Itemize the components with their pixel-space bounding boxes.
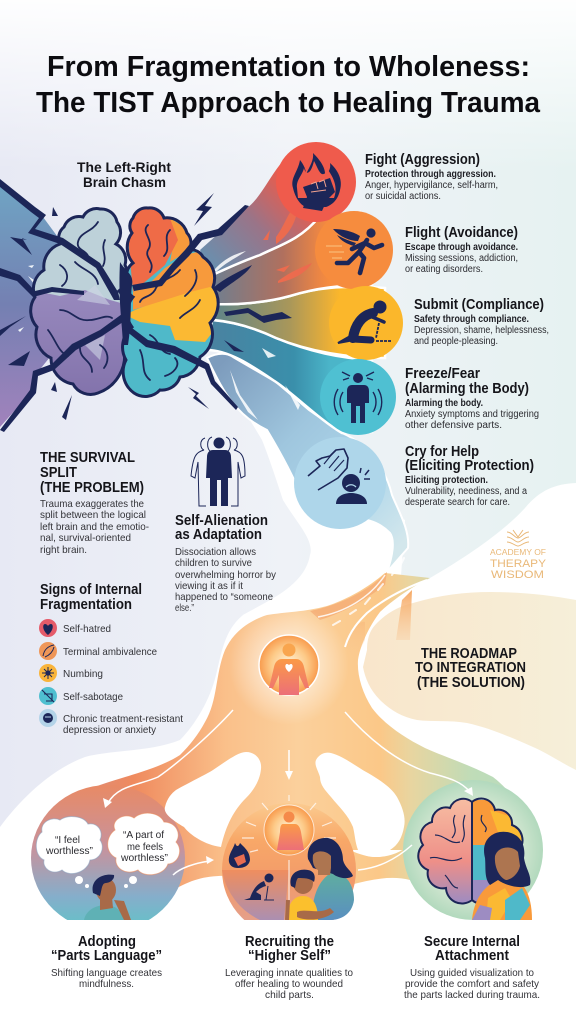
caption: secure internal attachment: Attachment bbox=[435, 948, 509, 964]
text block: self-alienation: happened to “someone bbox=[175, 592, 273, 603]
arrow: to parts language bbox=[103, 710, 233, 808]
label: fight: or suicidal actions. bbox=[365, 191, 441, 202]
brain folds bbox=[48, 222, 200, 380]
heading: left-right brain chasm: The Left-Right bbox=[77, 160, 172, 175]
label: freeze: Anxiety symptoms and triggering bbox=[405, 409, 539, 420]
caption: secure internal attachment: the parts lacked during trauma. bbox=[404, 990, 540, 1001]
sign: self-hatred bbox=[39, 619, 111, 637]
figure: woman with integrated parts bbox=[472, 832, 532, 920]
circle: adopting parts language bbox=[31, 785, 185, 931]
caption: adopting parts language: “Parts Language” bbox=[51, 948, 162, 964]
cracks through the brain bbox=[0, 179, 249, 432]
caption: secure internal attachment: Using guided visualization to bbox=[410, 968, 534, 979]
label: cry for help: desperate search for care. bbox=[405, 497, 510, 508]
figure: thinking man bbox=[75, 875, 137, 920]
sign: terminal ambivalence bbox=[39, 642, 157, 660]
lightning bolts bbox=[188, 193, 214, 409]
rays bbox=[242, 795, 336, 900]
label: submit bbox=[414, 297, 549, 347]
icon: kneeling figure with chain bbox=[338, 300, 392, 343]
label: fight: Anger, hypervigilance, self-harm, bbox=[365, 180, 498, 191]
list: signs of internal fragmentation bbox=[39, 582, 183, 736]
speech cloud: a part of me feels worthless bbox=[108, 813, 180, 875]
caption: recruiting the higher self: Leveraging innate qualities to bbox=[225, 968, 353, 979]
sign: chronic depression or anxiety bbox=[39, 709, 183, 736]
sign: self-sabotage: Self-sabotage bbox=[63, 692, 123, 703]
icon: running figure bbox=[326, 228, 382, 273]
Freeze panel bbox=[320, 359, 539, 435]
Flight panel bbox=[315, 211, 518, 289]
speech cloud: I feel worthless: worthless” bbox=[45, 846, 93, 857]
caption: secure internal attachment: Secure Internal bbox=[424, 934, 520, 950]
stream: flight bbox=[212, 212, 372, 304]
caption: adopting parts language bbox=[51, 934, 162, 990]
stream details bbox=[213, 205, 312, 420]
brain: integrated bbox=[418, 799, 522, 905]
icon: flaming fist bbox=[292, 153, 341, 211]
stream: cry for help bbox=[207, 354, 408, 572]
text block: self-alienation: Dissociation allows bbox=[175, 547, 256, 558]
circle: recruiting the higher self bbox=[222, 795, 356, 920]
text block: the survival split: SPLIT bbox=[40, 465, 77, 481]
label: fight: Fight (Aggression) bbox=[365, 152, 480, 168]
caption: recruiting the higher self: Recruiting the bbox=[245, 934, 334, 950]
text block: self-alienation: as Adaptation bbox=[175, 527, 262, 543]
label: flight: Flight (Avoidance) bbox=[405, 225, 518, 241]
text block: the survival split: right brain. bbox=[40, 545, 87, 556]
circle: secure internal attachment bbox=[403, 780, 543, 920]
sign: chronic depression or anxiety: depression or anxiety bbox=[63, 725, 157, 736]
label: freeze bbox=[405, 366, 539, 431]
caption: recruiting the higher self bbox=[225, 934, 353, 1001]
caption: adopting parts language: mindfulness. bbox=[79, 979, 134, 990]
text block: self-alienation: overwhelming horror by bbox=[175, 570, 277, 581]
arrow: to secure attachment bbox=[345, 712, 473, 796]
label: submit: Depression, shame, helplessness, bbox=[414, 325, 549, 336]
arrow: higher self to attachment bbox=[358, 845, 412, 870]
icon: integrated self orb bbox=[259, 635, 319, 695]
label: submit: Safety through compliance. bbox=[414, 314, 529, 325]
label: cry for help: (Eliciting Protection) bbox=[405, 458, 534, 474]
text block: the survival split: nal, survival-oriented bbox=[40, 533, 131, 544]
text block: self-alienation: children to survive bbox=[175, 558, 252, 569]
logo: academy of therapy wisdom: THERAPY bbox=[490, 558, 547, 570]
text block: the survival split bbox=[40, 450, 149, 556]
sign: self-sabotage bbox=[39, 687, 123, 705]
right hemisphere bbox=[124, 209, 217, 395]
heading: left-right brain chasm: Brain Chasm bbox=[83, 175, 166, 190]
label: cry for help: Vulnerability, neediness, and a bbox=[405, 486, 527, 497]
left hemisphere bbox=[32, 210, 125, 393]
sign: chronic depression or anxiety: Chronic treatment-resistant bbox=[63, 714, 183, 725]
icon: small kneeling figure bbox=[244, 874, 274, 900]
Submit panel bbox=[329, 286, 549, 360]
caption: secure internal attachment: provide the comfort and safety bbox=[405, 979, 540, 990]
logo: academy of therapy wisdom: WISDOM bbox=[491, 569, 544, 581]
speech cloud: I feel worthless bbox=[36, 817, 102, 874]
stream: submit bbox=[214, 287, 385, 358]
text block: the survival split: THE SURVIVAL bbox=[40, 450, 135, 466]
holes between branches bbox=[165, 752, 261, 847]
text block: the survival split: Trauma exaggerates the bbox=[40, 499, 144, 510]
title bbox=[36, 51, 541, 119]
label: submit: Submit (Compliance) bbox=[414, 297, 544, 313]
label: freeze: other defensive parts. bbox=[405, 420, 502, 431]
icon: alarmed body bbox=[334, 372, 382, 423]
caption: recruiting the higher self: offer healing to wounded bbox=[235, 979, 343, 990]
logo: academy of therapy wisdom: ACADEMY OF bbox=[490, 547, 546, 557]
label: cry for help bbox=[405, 444, 534, 508]
title: The TIST Approach to Healing Trauma bbox=[36, 87, 541, 119]
label: submit: and people-pleasing. bbox=[414, 336, 498, 347]
label: flight: Escape through avoidance. bbox=[405, 242, 518, 253]
title: From Fragmentation to Wholeness: bbox=[47, 51, 530, 83]
panel: the roadmap to integration bbox=[363, 592, 576, 770]
sign: numbing: Numbing bbox=[63, 669, 103, 680]
icon: small flaming fist bbox=[229, 843, 250, 868]
sign: terminal ambivalence: Terminal ambivalence bbox=[63, 647, 157, 658]
text block: self-alienation: else.” bbox=[175, 603, 194, 614]
caption: recruiting the higher self: child parts. bbox=[265, 990, 314, 1001]
label: cry for help: Eliciting protection. bbox=[405, 475, 488, 486]
speech cloud: I feel worthless: “I feel bbox=[55, 835, 80, 846]
list: signs of internal fragmentation: Signs of Internal bbox=[40, 582, 142, 598]
arrow: to higher self bbox=[285, 750, 293, 780]
logo: academy of therapy wisdom bbox=[490, 530, 547, 581]
stream: fight bbox=[200, 147, 325, 275]
left wedge with lightning bbox=[0, 182, 72, 427]
label: flight bbox=[405, 225, 518, 275]
label: cry for help: Cry for Help bbox=[405, 444, 479, 460]
text block: self-alienation: Self-Alienation bbox=[175, 513, 268, 529]
arrow: parts language to higher self bbox=[173, 856, 214, 875]
panel: the roadmap to integration: TO INTEGRATION bbox=[415, 660, 526, 676]
brain bbox=[0, 179, 249, 432]
text block: the survival split: left brain and the emotio- bbox=[40, 522, 149, 533]
label: flight: Missing sessions, addiction, bbox=[405, 253, 518, 264]
panel: the roadmap to integration: (THE SOLUTION) bbox=[417, 675, 525, 691]
Fight panel bbox=[276, 142, 498, 222]
integration tree bbox=[33, 558, 542, 892]
text block: the survival split: (THE PROBLEM) bbox=[40, 480, 144, 496]
sign: numbing bbox=[39, 664, 103, 682]
speech cloud: a part of me feels worthless: “A part of bbox=[123, 830, 164, 841]
list: signs of internal fragmentation: Fragmentation bbox=[40, 597, 132, 613]
icon: dissociated figures bbox=[191, 437, 245, 506]
label: fight: Protection through aggression. bbox=[365, 169, 496, 180]
stream: freeze bbox=[207, 320, 372, 433]
heading: left-right brain chasm bbox=[77, 160, 172, 190]
speech cloud: a part of me feels worthless: me feels bbox=[127, 842, 163, 853]
label: freeze: (Alarming the Body) bbox=[405, 381, 529, 397]
label: flight: or eating disorders. bbox=[405, 264, 483, 275]
panel: the roadmap to integration: THE ROADMAP bbox=[421, 646, 517, 662]
caption: adopting parts language: Adopting bbox=[78, 934, 136, 950]
caption: adopting parts language: Shifting language creates bbox=[51, 968, 162, 979]
caption: secure internal attachment bbox=[404, 934, 540, 1001]
text block: self-alienation: viewing it as if it bbox=[175, 581, 243, 592]
label: freeze: Alarming the body. bbox=[405, 398, 483, 409]
label: fight bbox=[365, 152, 498, 202]
text block: self-alienation bbox=[175, 513, 277, 614]
sign: self-hatred: Self-hatred bbox=[63, 624, 111, 635]
icon: higher self orb bbox=[264, 805, 314, 855]
Cry for help panel bbox=[294, 437, 534, 529]
label: freeze: Freeze/Fear bbox=[405, 366, 480, 382]
caption: recruiting the higher self: “Higher Self” bbox=[248, 948, 331, 964]
speech cloud: a part of me feels worthless: worthless” bbox=[120, 853, 168, 864]
text block: the survival split: split between the logical bbox=[40, 510, 146, 521]
icon: reaching hand and sad figure bbox=[308, 449, 370, 504]
figure: mother holding child bbox=[287, 838, 354, 920]
